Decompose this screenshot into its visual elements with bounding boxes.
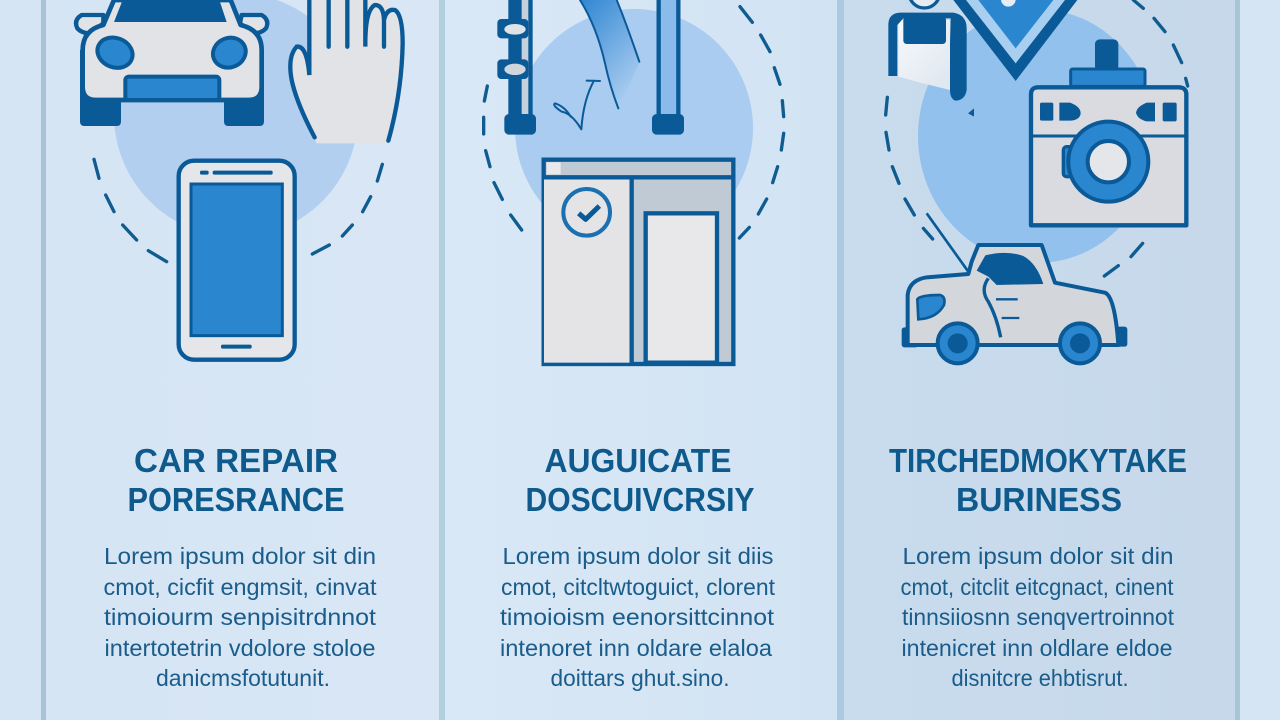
heading: document (526, 442, 754, 518)
dashed ring (886, 0, 1188, 276)
background circle (114, 0, 358, 237)
icon: right post (652, 0, 684, 135)
icon: blue swoosh (580, 0, 640, 108)
icon: car front (76, 0, 267, 126)
icon: hand-drawn tick (554, 81, 600, 129)
icon: smartphone (179, 161, 295, 360)
icon: document window (542, 160, 735, 364)
text block: business: Lorem ipsum dolor sit din (902, 543, 1174, 569)
dashed arc (94, 159, 382, 262)
grille (125, 77, 219, 100)
panel: business (839, 0, 1237, 720)
text block: document: doittars ghut.sino. (550, 665, 730, 691)
text block: car repair: timoiourm senpisitrdnnot (104, 604, 377, 630)
text block: document: cmot, citcltwtoguict, clorent (501, 574, 776, 600)
background circle (515, 9, 753, 247)
panel: car repair (44, 0, 441, 720)
text block: business: tinnsiiosnn senqvertroinnot (902, 604, 1175, 630)
icon: car with open hood (902, 213, 1127, 363)
text block: car repair: intertotetrin vdolore stoloe (104, 635, 376, 661)
icon: hand (290, 0, 403, 143)
panel: document (441, 0, 839, 720)
text block: car repair: cmot, cicfit engmsit, cinvat (104, 574, 377, 600)
heading: business (889, 442, 1187, 518)
icon: location badge (953, 0, 1077, 81)
text block: document: Lorem ipsum dolor sit diis (502, 543, 774, 569)
heading: car repair: PORESRANCE (128, 481, 344, 518)
icon: camera (1031, 39, 1186, 225)
heading: business: BURINESS (956, 481, 1122, 518)
icon: mechanic (888, 0, 974, 117)
icon: left post (497, 0, 536, 135)
text block: business (900, 543, 1175, 691)
text block: document: timoioism eenorsittcinnot (500, 604, 775, 630)
heading: document: DOSCUIVCRSIY (526, 481, 754, 518)
text block: document: intenoret inn oldare elaloa (500, 635, 772, 661)
text block: business: intenicret inn oldlare eldoe (902, 635, 1172, 661)
text block: car repair: danicmsfotutunit. (156, 665, 330, 691)
icon: check badge (563, 189, 610, 236)
text block: document (500, 543, 776, 691)
dashed ring (484, 7, 784, 238)
headlights (93, 32, 137, 73)
background circle (918, 9, 1156, 263)
text block: car repair (104, 543, 377, 691)
text block: business: disnitcre ehbtisrut. (952, 665, 1128, 691)
heading: business: TIRCHEDMOKYTAKE (889, 442, 1187, 479)
text block: car repair: Lorem ipsum dolor sit din (104, 543, 376, 569)
heading: car repair: CAR REPAIR (134, 442, 338, 479)
heading: car repair (128, 442, 344, 518)
heading: document: AUGUICATE (544, 442, 732, 479)
text block: business: cmot, citclit eitcgnact, cinent (900, 574, 1174, 600)
